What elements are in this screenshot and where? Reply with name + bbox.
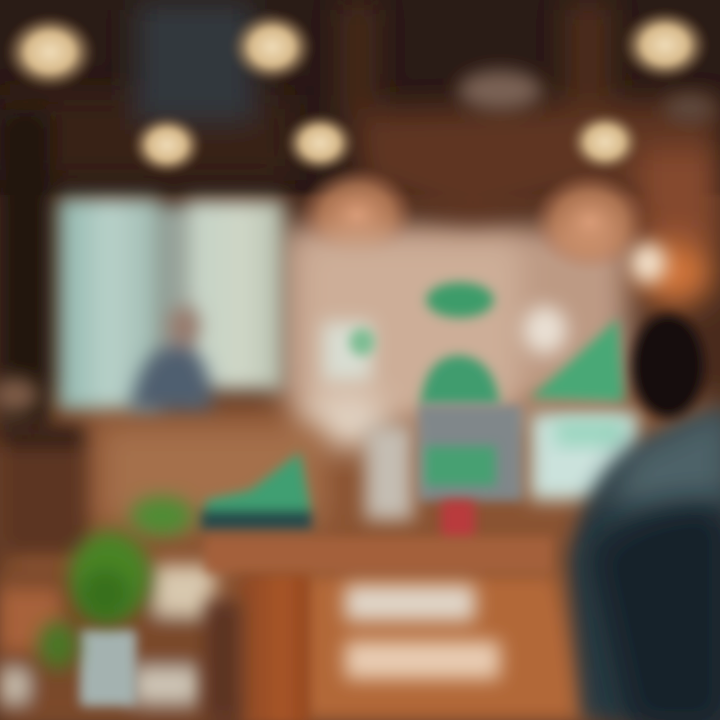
table: top and leg bbox=[205, 537, 553, 720]
ceiling lights bbox=[4, 9, 716, 175]
plant with pot bbox=[38, 496, 194, 706]
gray board bbox=[418, 405, 522, 501]
white screen bbox=[530, 412, 638, 500]
windows bbox=[58, 198, 284, 410]
papers on the table bbox=[345, 585, 500, 679]
floor bbox=[300, 575, 590, 720]
red cup bbox=[441, 500, 475, 540]
floor lower left bbox=[0, 565, 215, 720]
green area chart on the counter bbox=[200, 452, 312, 530]
person in the background bbox=[130, 306, 212, 412]
left wood cabinet bbox=[0, 377, 90, 555]
left wall: dark column bbox=[0, 110, 50, 430]
wood counter behind table bbox=[100, 425, 325, 525]
white highlight bbox=[523, 306, 567, 354]
wall lamps: orange glows bbox=[299, 167, 713, 306]
board green block bbox=[424, 446, 496, 486]
presenter: light figure bbox=[300, 392, 390, 448]
green triangle chart bbox=[530, 318, 624, 402]
presentation wall bbox=[300, 240, 638, 520]
green dome bbox=[420, 355, 500, 405]
ceiling: wooden beams bbox=[0, 0, 720, 250]
foreground person from behind bbox=[568, 314, 720, 720]
small chart bbox=[322, 322, 372, 382]
green oval bbox=[426, 282, 494, 318]
